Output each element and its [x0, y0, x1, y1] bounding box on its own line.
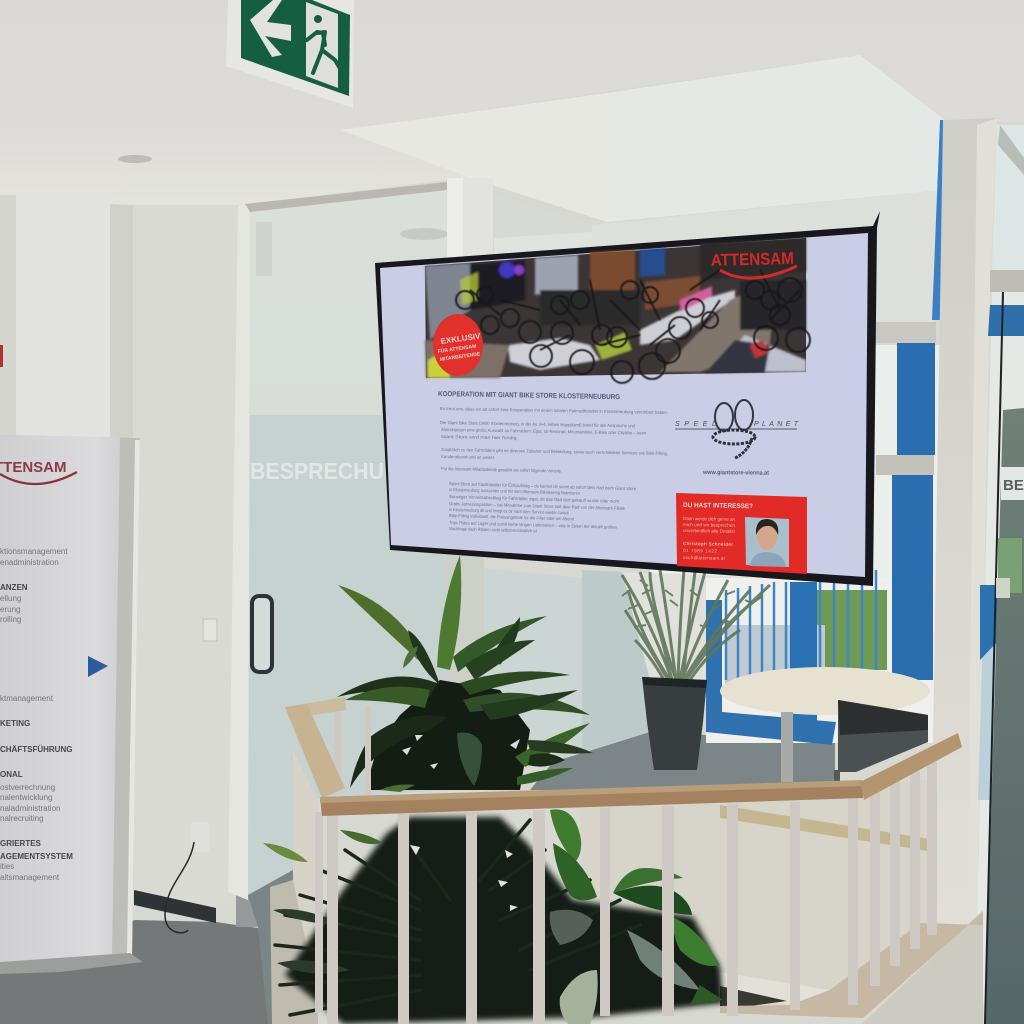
contact text [683, 516, 735, 561]
banner department list: altsmanagement [0, 873, 60, 882]
ceiling spot [118, 155, 152, 163]
article body text: Trips Rides auf Lager und somit keine langen Lieferzeiten – was in Zeiten der aktuell großen [449, 520, 618, 530]
speed planet logo [675, 400, 799, 458]
article body text: Nachfrage nach Rädern nicht selbstverständlich ist [449, 526, 538, 533]
skylight opening [340, 55, 947, 322]
right white column [930, 118, 997, 925]
lower right wall [862, 910, 983, 1024]
banner navigation arrow [88, 656, 108, 677]
ceiling [0, 0, 1024, 205]
website address: www.giantstore-vienna.at [702, 470, 769, 477]
banner department list: ktmanagement [0, 694, 54, 703]
banner department list: GRIERTES [0, 839, 42, 848]
lower broad leaves [263, 809, 723, 1024]
lower void wall [580, 780, 985, 1010]
left wall column [0, 193, 238, 905]
icon: exit arrow [250, 0, 291, 57]
landing curb [720, 912, 983, 1018]
rear room behind the glass [484, 568, 835, 790]
article body text: Altersklassen eine große Auswahl an Fahrrädern. Egal, ob Rennrad, Mountainbike, E-Bike oder Citybike – beim [441, 427, 646, 436]
rear handrail segment [285, 697, 346, 716]
banner department list: ANZEN [0, 583, 28, 592]
railing [285, 704, 983, 1024]
screen bezel [375, 211, 880, 586]
exclusive badge [433, 314, 483, 376]
article body text: Es freut uns, dass wir ab sofort eine Kooperation mit einem lokalen Fahrradhändler in Klosterneuburg vereinbart haben. [440, 406, 668, 415]
door lettering: BESPRECHU [250, 458, 384, 484]
article body text: Gratis Jahresinspektion – bei Mitnahme zum Giant Store holt dein Rad von der Attensam Filiale [449, 501, 626, 511]
upper dracaena leaves [337, 555, 593, 792]
article body text: Zusätzlich zu den Fahrrädern gibt es diverses Zubehör und Bekleidung, sowie auch verschiedene Services wie Bike-Fitting, [441, 447, 668, 456]
banner department list: nalrecruiting [0, 814, 44, 823]
contact text: mich und wir besprechen [683, 522, 735, 528]
contact heading: DU HAST INTERESSE? [683, 502, 753, 510]
article body text: Sport-Store auf Fachhändler für Einkaufstag – du kannst dir somit ab sofort dein Rad beim Giant Store [449, 481, 637, 491]
contact text: csch@attensam.at [683, 555, 726, 561]
right glass door [977, 125, 1024, 1024]
article body text: in Klosterneuburg ab und bringt es dir nach dem Service wieder zurück [449, 507, 570, 515]
contact text: 01 7989 1422 [683, 548, 718, 554]
banner department list: ONAL [0, 770, 23, 779]
roll-up banner [0, 435, 143, 974]
article body text: Für die Attensam Mitarbeitende gewährt sie sofort folgende Vorteile: [441, 466, 562, 474]
article heading: KOOPERATION MIT GIANT BIKE STORE KLOSTERNEUBURG [438, 389, 620, 401]
balusters [315, 706, 937, 1024]
contact text: Christoph Schneider [683, 541, 733, 547]
wooden handrail [285, 704, 962, 816]
icon: running figure [307, 16, 342, 73]
contact box [676, 493, 807, 574]
contact text: unverbindlich alle Details! [683, 528, 735, 534]
article body text: Kundendienst und so weiter. [441, 454, 495, 460]
contact text: Dann werde dich gerne an [683, 516, 735, 522]
window with outside view [622, 322, 940, 745]
banner department list: enadministration [0, 558, 59, 567]
glass door with frame [203, 178, 493, 1024]
stair stringer wall [270, 750, 318, 1024]
shop photo [425, 238, 810, 383]
speed planet logo: SPEED [675, 421, 717, 428]
banner department list [0, 547, 73, 882]
banner logo [0, 459, 77, 484]
banner department list: CHÄFTSFÜHRUNG [0, 745, 72, 754]
potted palm [622, 570, 770, 770]
banner department list: KETING [0, 719, 30, 728]
banner department list: ostverrechnung [0, 783, 55, 792]
exclusive badge: EXKLUSIV [440, 331, 482, 346]
carpet floor [0, 920, 268, 1024]
article body text: Bike-Fitting individuell, die Preisangebote für die Filter oder am Abend [449, 513, 575, 522]
article body text: in Klosterneuburg aussuchen und mit dem Attensam-Bikeleasing finanzieren [449, 487, 581, 496]
article body text: Der Giant Bike Store (3400 Klosterneuburg, in der Au 3+4, neben Happyland) bietet für alle Ansprüche und [440, 420, 636, 428]
contact portrait [745, 517, 789, 567]
indoor plant [263, 555, 723, 1024]
banner department list: ktionsmanagement [0, 547, 68, 556]
article body text [440, 406, 668, 533]
speed planet logo: PLANET [754, 421, 799, 428]
lower foliage mass [285, 817, 723, 1024]
banner department list: nalentwicklung [0, 793, 52, 802]
shop logo sign [711, 249, 797, 278]
banner department list: naladministration [0, 804, 60, 813]
banner department list: ellung [0, 594, 21, 603]
banner department list: ities [0, 862, 14, 871]
shop logo sign: ATTENSAM [711, 249, 794, 270]
table and chair [720, 667, 930, 802]
banner department list: AGEMENTSYSTEM [0, 852, 73, 861]
exclusive badge: MITARBEITENDE [439, 351, 481, 363]
exclusive badge: FÜR ATTENSAM [437, 343, 477, 355]
spiky lower fronds [275, 820, 640, 1015]
screen background [380, 233, 868, 577]
exit sign [226, 0, 354, 108]
banner department list: erung [0, 605, 20, 614]
wall-mounted display [375, 211, 880, 586]
article body text: Giant Store wird man hier fündig. [441, 434, 518, 440]
skirting and socket with cable [134, 822, 257, 933]
banner department list: rolling [0, 615, 21, 624]
article body text: Sonstiger Vorzeitsabschlag für Fahrräder, egal, ob das Rad dort gekauft wurde oder nicht [449, 494, 620, 504]
